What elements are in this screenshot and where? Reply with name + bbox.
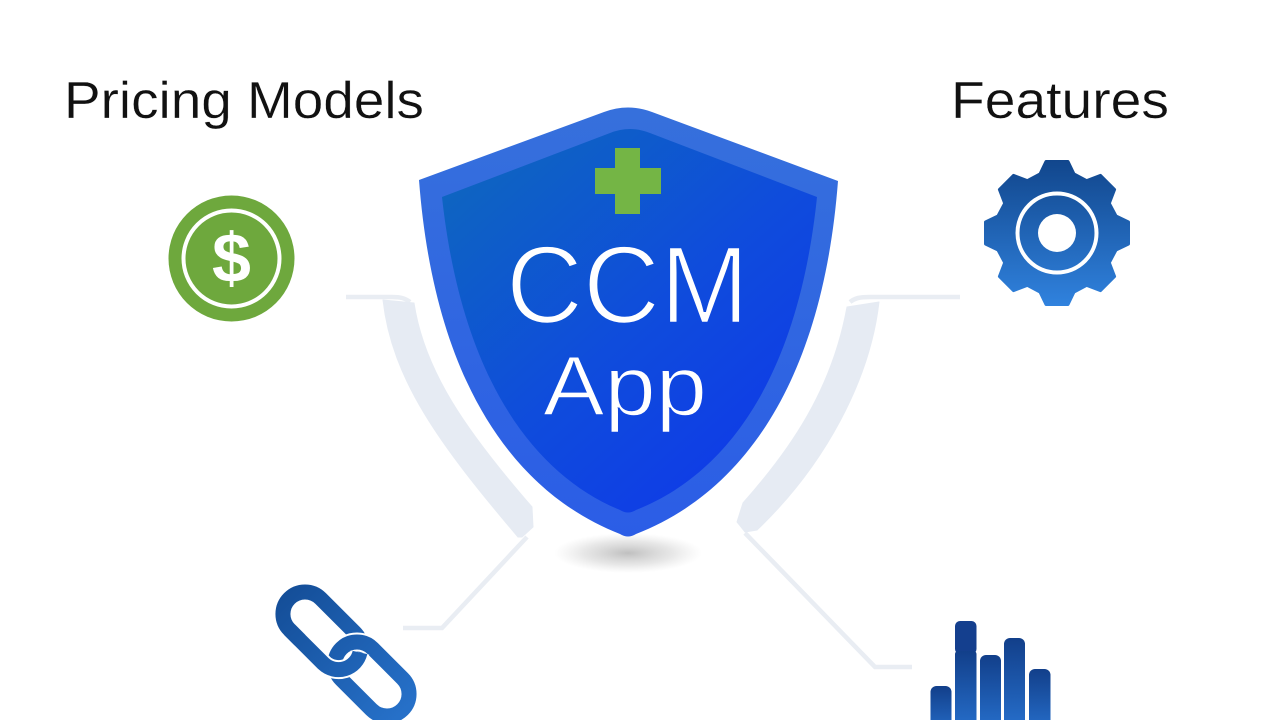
icon: chain link bbox=[283, 592, 409, 716]
shield bbox=[419, 108, 838, 536]
right connector bracket bbox=[737, 297, 960, 667]
left connector bracket bbox=[346, 297, 533, 628]
shield shadow bbox=[554, 533, 702, 573]
label: App: App bbox=[543, 339, 707, 433]
heading: Features: Features bbox=[951, 72, 1169, 130]
icon: dollar coin: $ bbox=[212, 219, 251, 297]
heading: Pricing Models: Pricing Models bbox=[64, 72, 424, 130]
shield inner bbox=[442, 129, 817, 512]
label: CCM: CCM bbox=[506, 224, 749, 347]
icon: dollar coin bbox=[168, 196, 294, 322]
shield outer bbox=[419, 108, 838, 536]
icon: bar chart bbox=[930, 621, 1050, 720]
icon: gear bbox=[986, 162, 1128, 304]
icon: green cross bbox=[595, 148, 661, 214]
